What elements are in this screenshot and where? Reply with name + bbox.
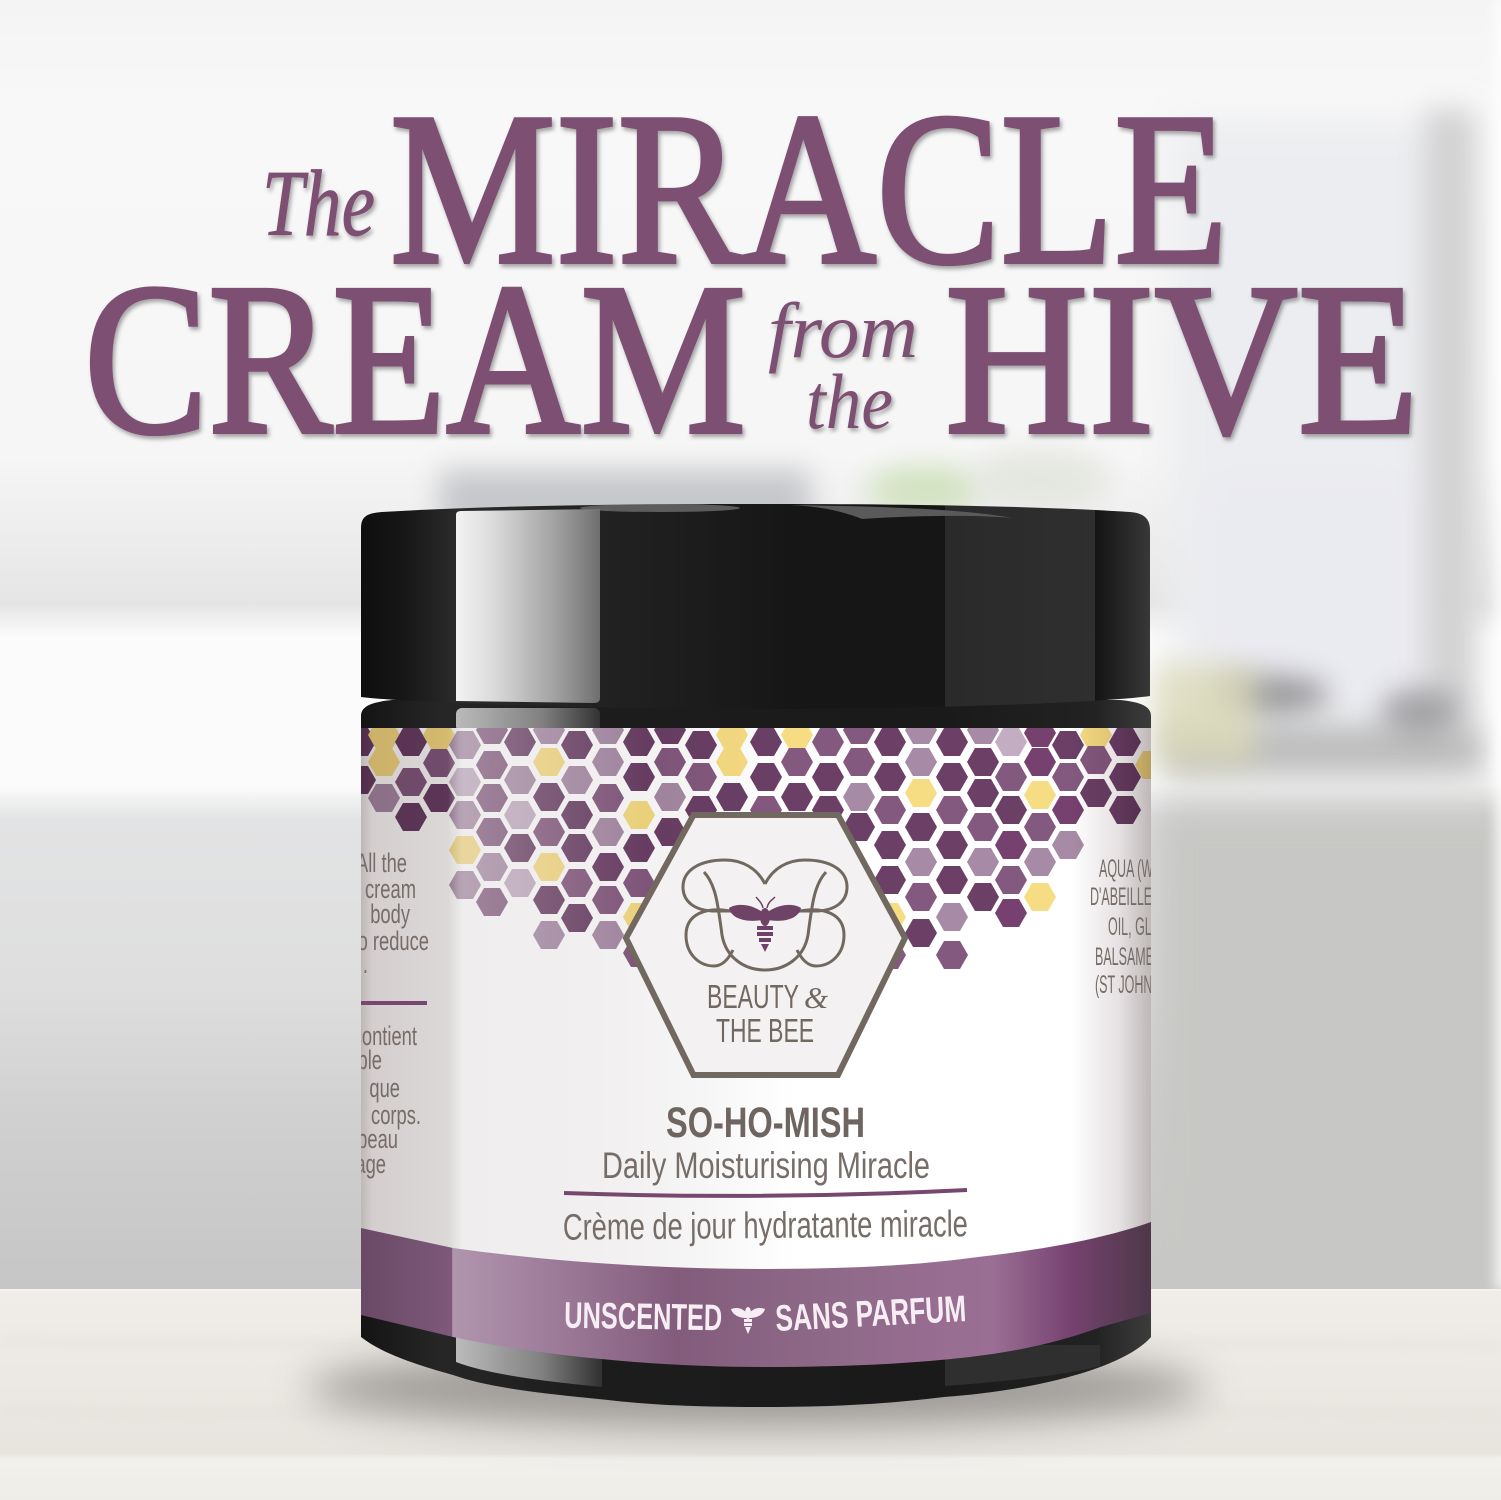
- base highlight left: [456, 1330, 602, 1387]
- UNSCENTED: UNSCENTED: [564, 1295, 723, 1338]
- SANS PARFUM: SANS PARFUM: [774, 1288, 967, 1339]
- base highlight right: [945, 1345, 1100, 1386]
- title word: the: the: [806, 358, 893, 445]
- right side ingredients text: OIL, GLYCERIN: [1108, 913, 1198, 941]
- honeycomb pattern: [344, 716, 1167, 969]
- right side ingredients text: [1091, 859, 1151, 998]
- right side ingredients text: BALSAMEA: [1095, 943, 1163, 971]
- left side panel text: peau: [357, 1123, 398, 1154]
- left side panel text: cream: [365, 873, 416, 904]
- jar body: [361, 700, 1151, 1407]
- label: [344, 716, 1198, 1367]
- left side panel text: body: [370, 898, 410, 929]
- left panel divider: [361, 1001, 427, 1005]
- left side panel text: corps.: [371, 1099, 421, 1130]
- title: [84, 69, 1419, 479]
- monogram: [683, 860, 847, 970]
- band text: [564, 1288, 967, 1339]
- icon: bee: [729, 897, 801, 952]
- left side panel text: [361, 852, 428, 1178]
- lid: [361, 504, 1150, 709]
- left side panel text: All the: [356, 847, 407, 878]
- label cylinder shading: [361, 728, 1151, 1290]
- lid top reflections: [580, 504, 740, 512]
- cream jar: [344, 504, 1198, 1407]
- left side panel text: age: [355, 1148, 386, 1179]
- left side panel text: contient: [353, 1020, 417, 1051]
- product name: SO-HO-MISH: [666, 1099, 865, 1147]
- lid highlight: [456, 509, 600, 703]
- icon: small bee: [731, 1307, 765, 1334]
- neck highlight: [456, 708, 600, 732]
- brand name: THE BEE: [716, 1012, 814, 1049]
- right side ingredients text: AQUA (WATER): [1099, 855, 1189, 883]
- marble counter: [0, 1289, 1501, 1500]
- English descriptor: Daily Moisturising Miracle: [602, 1145, 930, 1186]
- title word: CREAM: CREAM: [84, 239, 746, 479]
- title word: from: from: [768, 287, 918, 374]
- title word: The: The: [262, 152, 375, 256]
- left side panel text: que: [369, 1072, 400, 1103]
- title word: HIVE: HIVE: [945, 239, 1419, 479]
- right side ingredients text: D'ABEILLE: [1090, 883, 1152, 911]
- logo hexagon: [626, 815, 905, 1075]
- logo badge: [626, 815, 905, 1075]
- title word: MIRACLE: MIRACLE: [390, 69, 1228, 310]
- left side panel text: able: [347, 1044, 382, 1075]
- brand name: [708, 985, 828, 1042]
- brand name: BEAUTY: [707, 978, 799, 1015]
- purple band: [361, 1222, 1151, 1367]
- right side ingredients text: (ST JOHN'S: [1095, 971, 1163, 999]
- brand name: &: [804, 980, 828, 1015]
- highlight over honeycomb: [450, 728, 620, 949]
- left side panel text: .: [363, 948, 368, 979]
- label paper: [361, 728, 1151, 978]
- purple rule: [564, 1190, 967, 1196]
- left side panel text: to reduce: [352, 925, 429, 956]
- French descriptor: Crème de jour hydratante miracle: [563, 1203, 968, 1248]
